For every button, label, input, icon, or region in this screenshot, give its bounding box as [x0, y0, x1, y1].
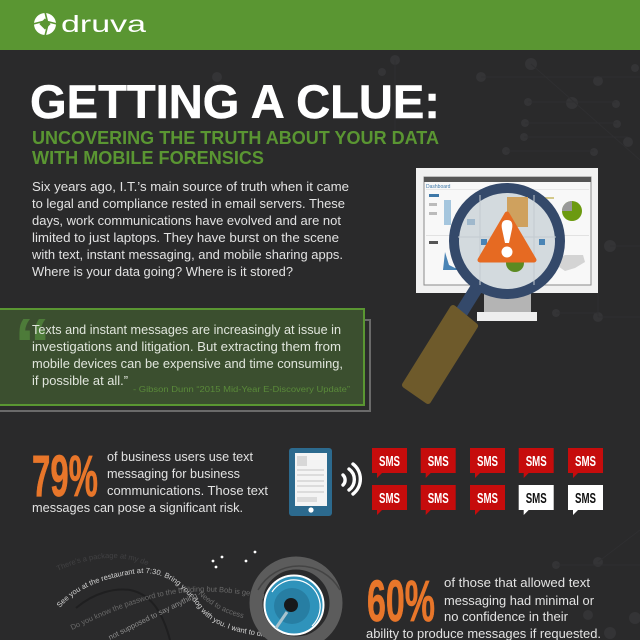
stat description: no confidence in their — [444, 609, 569, 624]
panel: quote — [0, 303, 370, 411]
SMS bubble 6 — [372, 485, 407, 515]
SMS bubble 2: SMS — [428, 453, 449, 470]
illustration: swirling messages: Need to access — [198, 590, 244, 618]
SMS bubble 6: SMS — [379, 490, 400, 507]
subtitle — [32, 128, 439, 168]
logo: druva — [33, 11, 146, 37]
stat description: of business users use text — [107, 449, 253, 464]
intro paragraph: to legal and compliance rested in email servers. These — [32, 196, 345, 211]
subtitle: WITH MOBILE FORENSICS — [32, 148, 264, 168]
icon: warning triangle — [480, 214, 534, 260]
intro paragraph: Where is your data going? Where is it stored? — [32, 264, 293, 279]
subtitle: UNCOVERING THE TRUTH ABOUT YOUR DATA — [32, 128, 439, 148]
SMS bubble 4 — [519, 448, 554, 478]
monitor screen — [416, 168, 598, 293]
SMS bubble 5: SMS — [575, 453, 596, 470]
SMS bubble 8: SMS — [477, 490, 498, 507]
monitor screen: Dashboard — [426, 184, 451, 190]
illustration: swirling messages: Do you know the password to the building but Bob is getting tired — [70, 586, 264, 630]
stat description — [32, 449, 268, 515]
quote text: Texts and instant messages are increasingly at issue in — [32, 322, 341, 337]
stat description: messaging had minimal or — [444, 593, 595, 608]
monitor stand — [477, 293, 537, 321]
icon: quote mark: “ — [14, 303, 51, 386]
intro paragraph: limited to just laptops. They have burst on the scene — [32, 230, 339, 245]
stat description: messages can pose a significant risk. — [32, 500, 243, 515]
stat description — [366, 575, 601, 640]
intro paragraph: with text, instant messaging, and mobile sharing apps. — [31, 247, 343, 262]
SMS bubble 7: SMS — [428, 490, 449, 507]
SMS bubble 10: SMS — [575, 490, 596, 507]
white dots — [212, 551, 256, 568]
SMS bubble 10 — [568, 485, 603, 515]
SMS bubble 3: SMS — [477, 453, 498, 470]
intro paragraph: Six years ago, I.T.’s main source of truth when it came — [32, 179, 349, 194]
quote text: if possible at all.” — [32, 373, 128, 388]
icon: signal waves — [343, 464, 360, 494]
stat description: communications. Those text — [107, 483, 268, 498]
SMS bubble 9: SMS — [526, 490, 547, 507]
stat description: messaging for business — [107, 466, 240, 481]
SMS bubble 2 — [421, 448, 456, 478]
stat: 79%: 79% — [32, 444, 98, 509]
header bar — [0, 0, 640, 50]
quote text: investigations and litigation. But extracting them from — [32, 339, 341, 354]
stat: 60%: 60% — [367, 569, 435, 634]
quote attribution: - Gibson Dunn “2015 Mid-Year E-Discovery Update” — [133, 385, 350, 394]
logo: druva: druva — [61, 11, 146, 37]
stat description: of those that allowed text — [444, 575, 590, 590]
illustration: swirling messages: There’s a package at my desk — [56, 553, 148, 570]
illustration: monitor under magnifying glass — [405, 168, 598, 401]
quote text: mobile devices can be expensive and time consuming, — [32, 356, 343, 371]
magnifier lens — [454, 188, 560, 294]
magnifier handle — [405, 289, 476, 401]
illustration: swirling messages — [56, 550, 342, 640]
SMS bubble 5 — [568, 448, 603, 478]
SMS bubble 4: SMS — [526, 453, 547, 470]
SMS bubble 1 — [372, 448, 407, 478]
SMS bubble 9 — [519, 485, 554, 515]
stat: 79% — [32, 444, 268, 515]
title: GETTING A CLUE: — [30, 75, 440, 128]
intro paragraph — [31, 179, 349, 279]
SMS bubble 7 — [421, 485, 456, 515]
intro paragraph: days, work communications have evolved and are not — [32, 213, 341, 228]
quote text — [32, 322, 343, 388]
SMS bubble 8 — [470, 485, 505, 515]
SMS grid — [372, 448, 603, 515]
SMS bubble 3 — [470, 448, 505, 478]
stat: 60% — [366, 569, 601, 640]
icon: eye vortex — [256, 563, 340, 640]
SMS bubble 1: SMS — [379, 453, 400, 470]
illustration: swirling messages: See you at the restaurant at 7:30. Bring your dog with you. I want to discuss — [57, 568, 264, 637]
icon: tablet — [289, 448, 332, 516]
